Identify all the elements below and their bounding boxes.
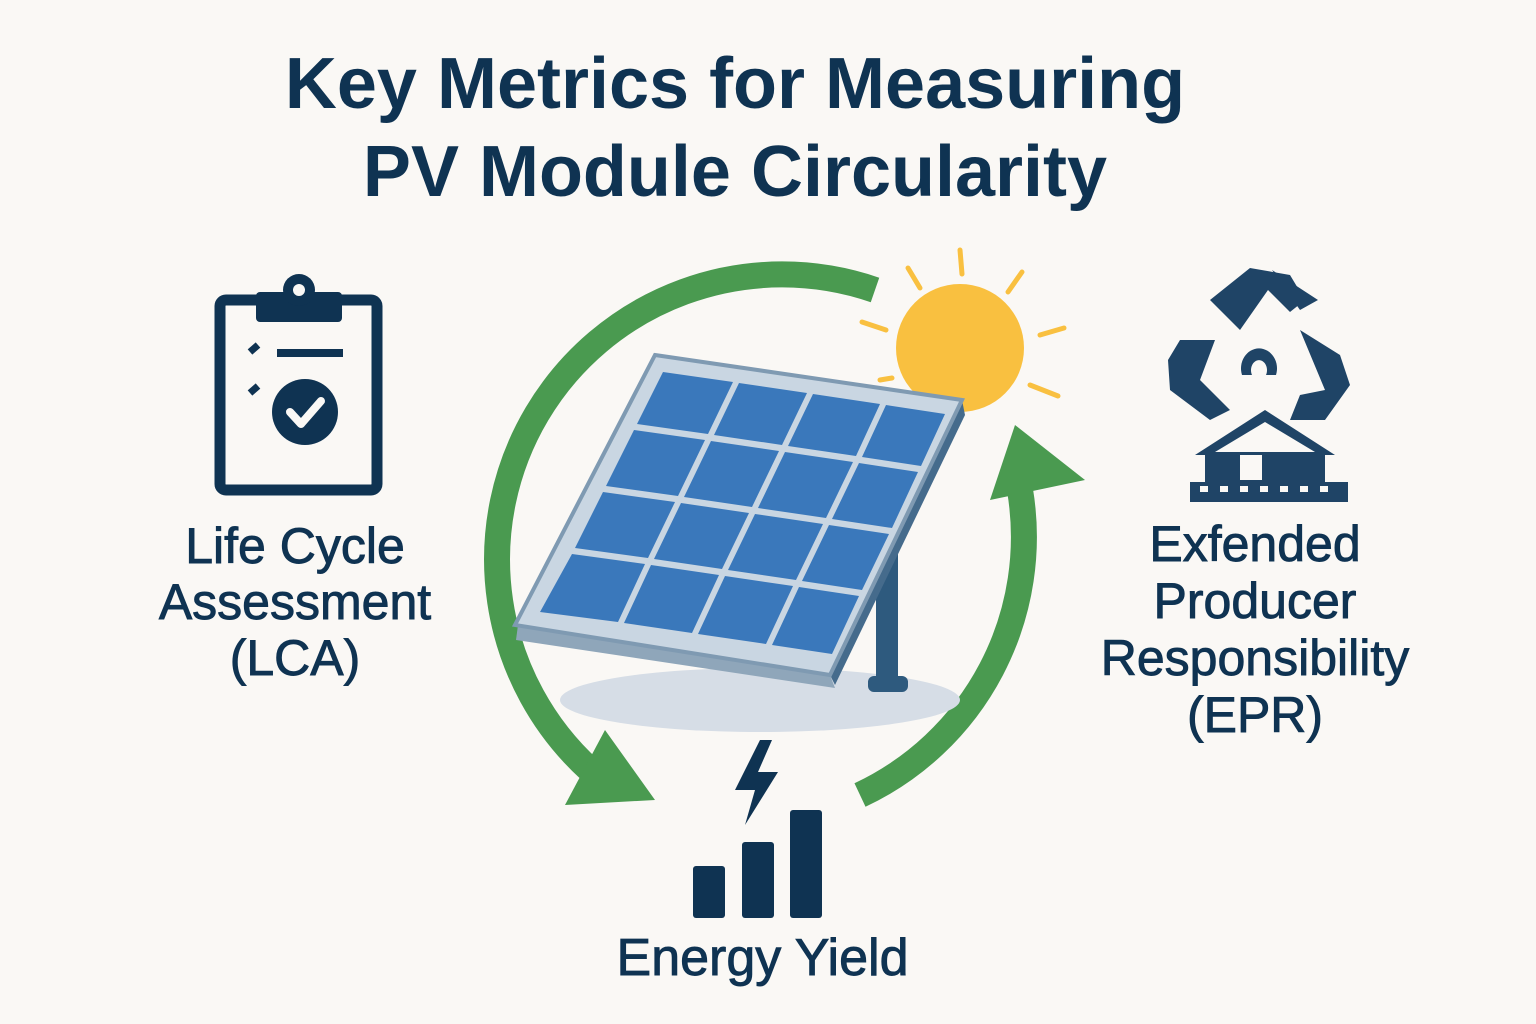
text: EPR: Responsibility: [1101, 630, 1409, 686]
text: LCA: Life Cycle: [185, 518, 405, 574]
title: PV Module Circularity: [363, 132, 1107, 212]
icon: lightning and bar chart: [693, 740, 822, 918]
icon: recycle with house: [1168, 268, 1350, 502]
text: EPR: Producer: [1154, 573, 1356, 629]
text: EPR: (EPR): [1187, 687, 1323, 743]
text: LCA: Assessment: [159, 574, 431, 630]
arrow: left cycle arc: [497, 274, 875, 805]
icon: sun: [862, 250, 1064, 412]
title: [285, 44, 1185, 212]
text: LCA: [158, 518, 432, 686]
text: EPR: Exfended: [1149, 516, 1361, 572]
text: Energy Yield: Energy Yield: [617, 929, 908, 987]
arrow: right cycle arc: [860, 425, 1085, 795]
icon: clipboard: [220, 274, 377, 490]
text: LCA: (LCA): [230, 630, 360, 686]
title: Key Metrics for Measuring: [285, 44, 1185, 124]
icon: solar panel: [515, 355, 965, 732]
text: EPR: [1101, 516, 1410, 743]
